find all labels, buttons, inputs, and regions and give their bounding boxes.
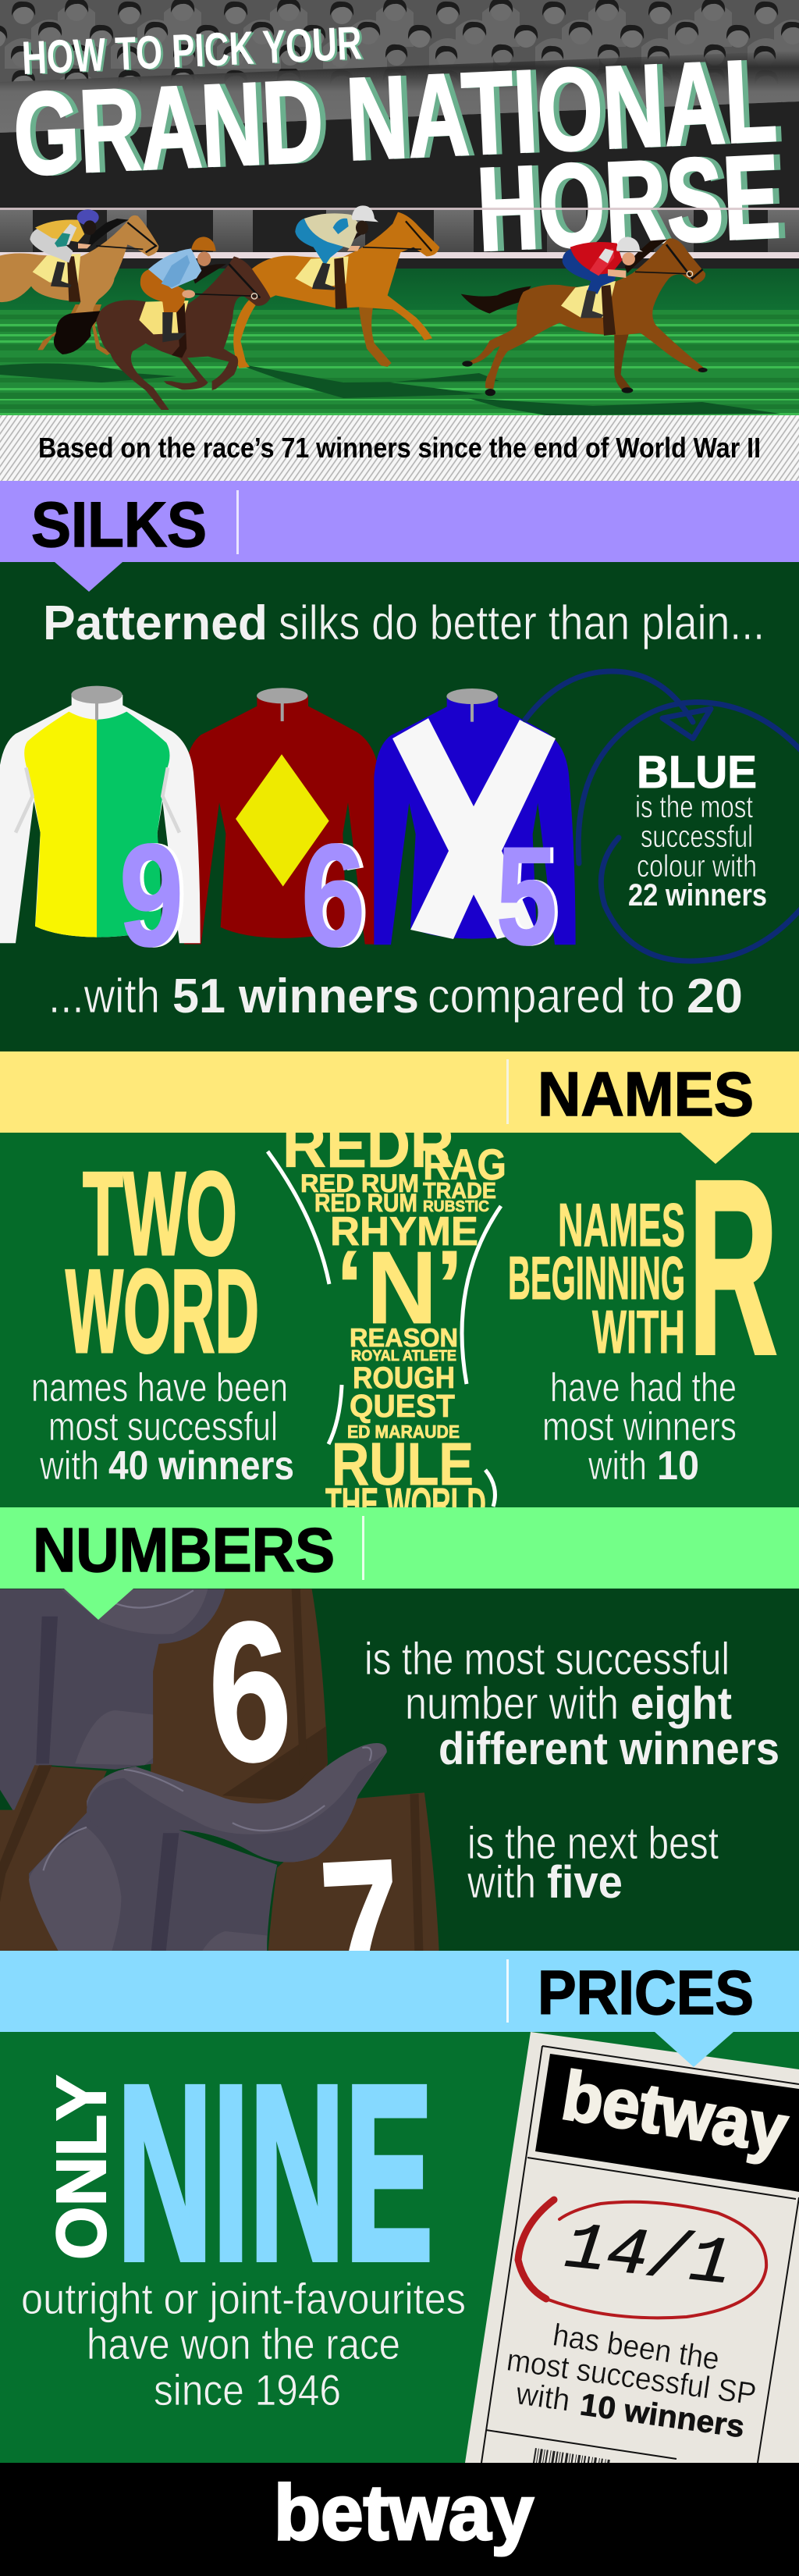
callout: blue: 22 winners <box>628 878 767 913</box>
trophy made of winning names: ’ <box>435 1229 463 1343</box>
trophy made of winning names <box>282 1111 506 1528</box>
callout: blue: successful <box>641 820 753 854</box>
trophy outline strokes <box>268 1151 501 1507</box>
text: two word: TWO <box>83 1147 237 1280</box>
illustration: betting slip <box>465 2032 799 2477</box>
text: have had the most winners: with <box>588 1443 647 1489</box>
illustration: horse and jockey, orange cap dark horse <box>54 237 271 410</box>
text: six most successful <box>364 1634 779 1774</box>
title: how to pick your: HOW TO PICK YOUR <box>23 17 365 85</box>
trophy made of winning names: RUBSTIC <box>423 1198 489 1215</box>
horse shadows <box>0 363 780 415</box>
strapline band <box>0 415 799 481</box>
panel: prices <box>0 2032 799 2477</box>
panel: silks <box>0 562 799 1051</box>
illustration: horse and jockey, white cap beige silks <box>233 205 439 368</box>
text: seven next best: five <box>547 1857 623 1908</box>
shirt: red with yellow diamond <box>184 688 385 945</box>
barcode <box>533 2448 610 2477</box>
text: have had the most winners: 10 <box>657 1443 699 1489</box>
text: patterned silks do better than plain <box>43 596 765 650</box>
text: seven next best <box>467 1818 719 1908</box>
odds: 14/1 <box>561 2211 735 2303</box>
logo on slip: betway <box>557 2056 793 2168</box>
trophy made of winning names: REASON <box>350 1323 458 1352</box>
text: names beginning with <box>508 1190 685 1366</box>
text: with 51 winners compared to 20: compared to <box>428 970 675 1023</box>
arrow: curved navy arrow circling the blue callout <box>525 671 799 961</box>
text: names have been most successful: names have been <box>31 1365 288 1411</box>
crowd background <box>0 0 799 133</box>
number 7: 7 <box>315 1817 407 2044</box>
text: six most successful: eight <box>630 1678 732 1729</box>
text: names have been most successful: 40 winners <box>108 1443 294 1489</box>
text: six most successful: different winners <box>439 1724 779 1774</box>
trophy made of winning names: ROUGH <box>353 1361 455 1395</box>
number 9: 9 <box>123 815 187 977</box>
text: with 51 winners compared to 20: 20 <box>687 970 743 1023</box>
text: names have been most successful: most successful <box>48 1404 278 1450</box>
heading: prices: PRICES <box>538 1958 754 2027</box>
trophy made of winning names: RULE <box>332 1431 474 1498</box>
shirt: blue with white saltire <box>374 688 576 945</box>
panel: hero header <box>0 0 799 276</box>
header: prices <box>0 1951 799 2067</box>
callout: blue: BLUE <box>637 747 757 798</box>
heading: numbers: NUMBERS <box>33 1515 335 1585</box>
header: names <box>0 1051 799 1164</box>
heading: names: NAMES <box>538 1059 754 1129</box>
slip text: most successful SP <box>505 2343 758 2412</box>
slip text: 10 winners <box>578 2387 747 2444</box>
text: favourites: since 1946 <box>154 2365 341 2414</box>
trophy made of winning names: ED MARAUDE <box>347 1421 460 1442</box>
number 6: 6 <box>301 815 365 977</box>
text: have had the most winners <box>542 1365 737 1489</box>
title: how to pick your <box>21 16 365 85</box>
logo: betway: betway <box>274 2469 534 2556</box>
text: six most successful: number with <box>405 1678 619 1729</box>
callout: blue: colour with <box>637 849 757 884</box>
shirt: yellow and green with white sleeves <box>0 686 201 943</box>
trophy made of winning names: RED RUM <box>314 1189 417 1217</box>
text: favourites: outright or joint-favourites <box>21 2274 466 2323</box>
text: two word <box>66 1147 259 1378</box>
text: have had the most winners: have had the <box>550 1365 737 1411</box>
trophy made of winning names: TRADE <box>423 1179 496 1204</box>
trophy made of winning names: ‘ <box>336 1229 364 1343</box>
trophy made of winning names: N <box>367 1230 437 1345</box>
illustration: horse and jockey, purple cap <box>0 209 158 355</box>
text: names have been most successful <box>31 1365 294 1489</box>
trophy made of winning names: THE WORLD <box>325 1478 486 1528</box>
text: seven next best: is the next best <box>467 1818 719 1869</box>
text: patterned silks do better than plain: Patterned <box>43 596 268 650</box>
text: names beginning with: WITH <box>592 1297 685 1366</box>
text: have had the most winners: most winners <box>542 1404 737 1450</box>
text: with 51 winners compared to 20: 51 winners <box>172 970 419 1023</box>
text: names have been most successful: with <box>39 1443 99 1489</box>
trophy made of winning names: RAG <box>423 1140 506 1189</box>
slip text: with <box>513 2376 572 2418</box>
number 5: 5 <box>499 818 560 973</box>
footer <box>0 2463 799 2576</box>
header: numbers <box>0 1507 799 1620</box>
callout: blue: is the most <box>635 790 753 824</box>
trophy made of winning names: RHYME <box>330 1209 478 1254</box>
number 9: 9 <box>119 815 183 977</box>
text: favourites <box>21 2274 466 2414</box>
illustration: saddle <box>0 1589 440 1991</box>
panel: numbers <box>0 1579 799 2044</box>
number 5: 5 <box>496 818 557 973</box>
trophy made of winning names: REDR <box>282 1111 454 1180</box>
trophy made of winning names: QUEST <box>350 1388 455 1424</box>
red pen circle <box>518 2200 766 2318</box>
text: two word: WORD <box>66 1245 259 1378</box>
number 6: 6 <box>203 1579 297 1806</box>
text: favourites: have won the race <box>87 2319 400 2368</box>
text: names beginning with: NAMES <box>558 1190 685 1259</box>
text: with 51 winners compared to 20: ...with <box>48 970 160 1023</box>
text: seven next best: with <box>467 1857 536 1908</box>
slip text <box>505 2318 758 2444</box>
text: only: ONLY <box>43 2075 121 2260</box>
number 6: 6 <box>305 815 369 977</box>
text: nine: NINE <box>117 2033 433 2312</box>
illustration: leading horse and jockey, red silks <box>461 237 708 396</box>
stadium barrier stripes <box>0 210 799 253</box>
header: silks <box>0 481 799 592</box>
panel: racetrack turf <box>0 269 799 415</box>
trophy made of winning names: RED RUM <box>300 1169 419 1197</box>
text: six most successful: is the most successful <box>364 1634 730 1685</box>
title: how to pick your: HOW TO PICK YOUR <box>21 16 363 84</box>
slip text: has been the <box>551 2318 722 2377</box>
text: with 51 winners compared to 20 <box>48 970 743 1023</box>
heading: silks: SILKS <box>31 489 207 560</box>
trophy made of winning names: ROYAL ATLETE <box>351 1348 456 1364</box>
panel: names <box>0 1111 799 1528</box>
callout: blue <box>628 747 767 913</box>
